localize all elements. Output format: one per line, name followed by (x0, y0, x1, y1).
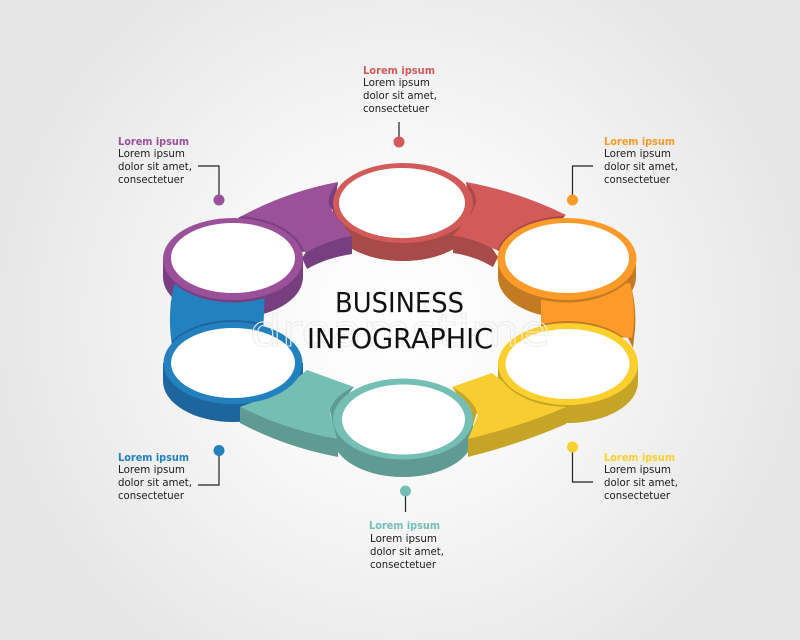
callout: red: consectetuer (363, 102, 429, 115)
callout: orange: consectetuer (604, 173, 670, 186)
callout: orange: Lorem ipsum (604, 135, 675, 148)
callout: blue: Lorem ipsum (118, 451, 189, 464)
callout: purple: Lorem ipsum (118, 135, 189, 148)
title: INFOGRAPHIC (307, 322, 493, 355)
callout: orange: dolor sit amet, (604, 160, 678, 173)
title: BUSINESS (335, 286, 464, 319)
callout: purple (118, 135, 224, 206)
callout: blue (118, 445, 224, 502)
callout: yellow: Lorem ipsum (604, 451, 675, 464)
circle: orange (498, 218, 636, 300)
watermark: dreamstime (250, 306, 550, 357)
callout: red: Lorem ipsum (363, 76, 430, 89)
callout: teal (369, 486, 444, 571)
circle side walls (163, 183, 638, 477)
circle: purple (163, 218, 303, 300)
callout: purple: consectetuer (118, 173, 184, 186)
circle: teal (333, 378, 473, 460)
callout: blue: consectetuer (118, 489, 184, 502)
title (307, 286, 493, 355)
callout: teal: dolor sit amet, (370, 545, 444, 558)
callout: yellow: consectetuer (604, 489, 670, 502)
arrow: orange segment (541, 283, 636, 348)
arrow: teal segment (240, 370, 354, 457)
callout: orange (567, 135, 678, 206)
callout: orange: Lorem ipsum (604, 147, 671, 160)
callout: yellow: Lorem ipsum (604, 463, 671, 476)
callout: purple: Lorem ipsum (118, 147, 185, 160)
arrow: yellow segment (452, 373, 566, 457)
callout: yellow (567, 442, 678, 502)
arrow: blue segment (170, 285, 265, 344)
arrow: red segment (453, 182, 566, 267)
callout: blue: Lorem ipsum (118, 463, 185, 476)
circle: yellow (498, 323, 638, 405)
circle: red (333, 163, 473, 243)
callout: yellow: dolor sit amet, (604, 476, 678, 489)
callout: blue: dolor sit amet, (118, 476, 192, 489)
arrow: purple segment (238, 182, 352, 269)
callout: teal: consectetuer (370, 558, 436, 571)
callout: red: Lorem ipsum (363, 64, 435, 77)
callout: teal: Lorem ipsum (369, 519, 440, 532)
callout: teal: Lorem ipsum (370, 532, 437, 545)
callout: red: dolor sit amet, (363, 89, 437, 102)
callout: purple: dolor sit amet, (118, 160, 192, 173)
callout: red (363, 64, 437, 148)
circle: blue (164, 322, 302, 404)
